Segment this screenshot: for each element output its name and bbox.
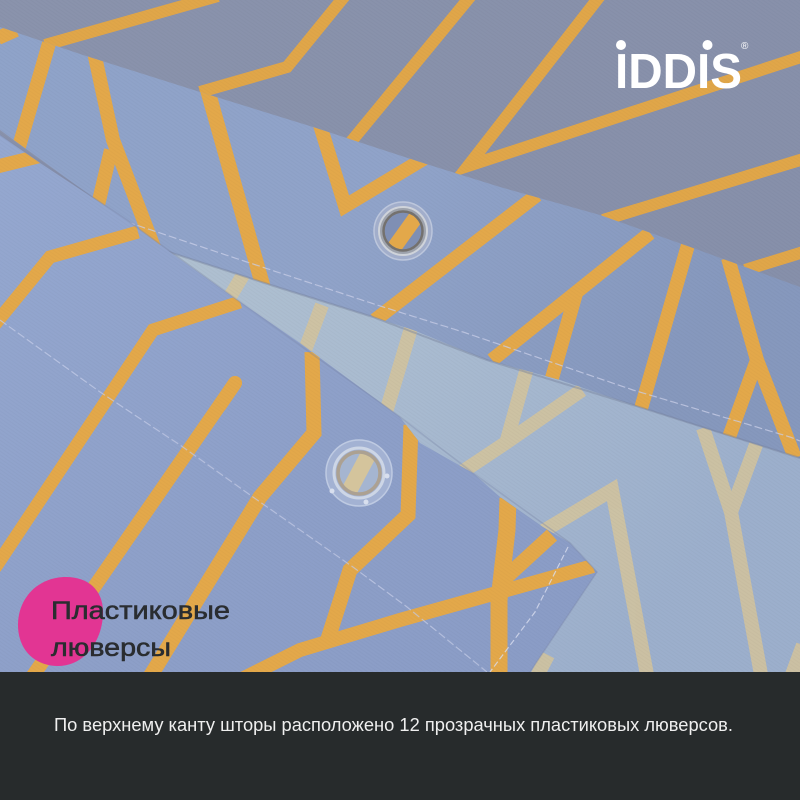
logo: iDDiS: ® xyxy=(741,41,749,52)
heading: люверсы xyxy=(51,634,171,662)
back curtain layer xyxy=(0,0,800,458)
heading xyxy=(51,597,230,662)
heading: Пластиковые xyxy=(51,597,230,625)
caption text: По верхнему канту шторы расположено 12 прозрачных пластиковых люверсов. xyxy=(54,715,733,735)
bottom caption bar xyxy=(0,672,800,800)
pale translucent lower layer xyxy=(171,252,800,672)
middle curtain hem band xyxy=(0,27,800,458)
grommet: lower xyxy=(326,440,392,506)
front curtain layer xyxy=(0,135,597,680)
logo: iDDiS: IDDIS xyxy=(615,45,742,99)
grommet: upper xyxy=(374,202,432,260)
pink accent blob xyxy=(18,577,103,666)
